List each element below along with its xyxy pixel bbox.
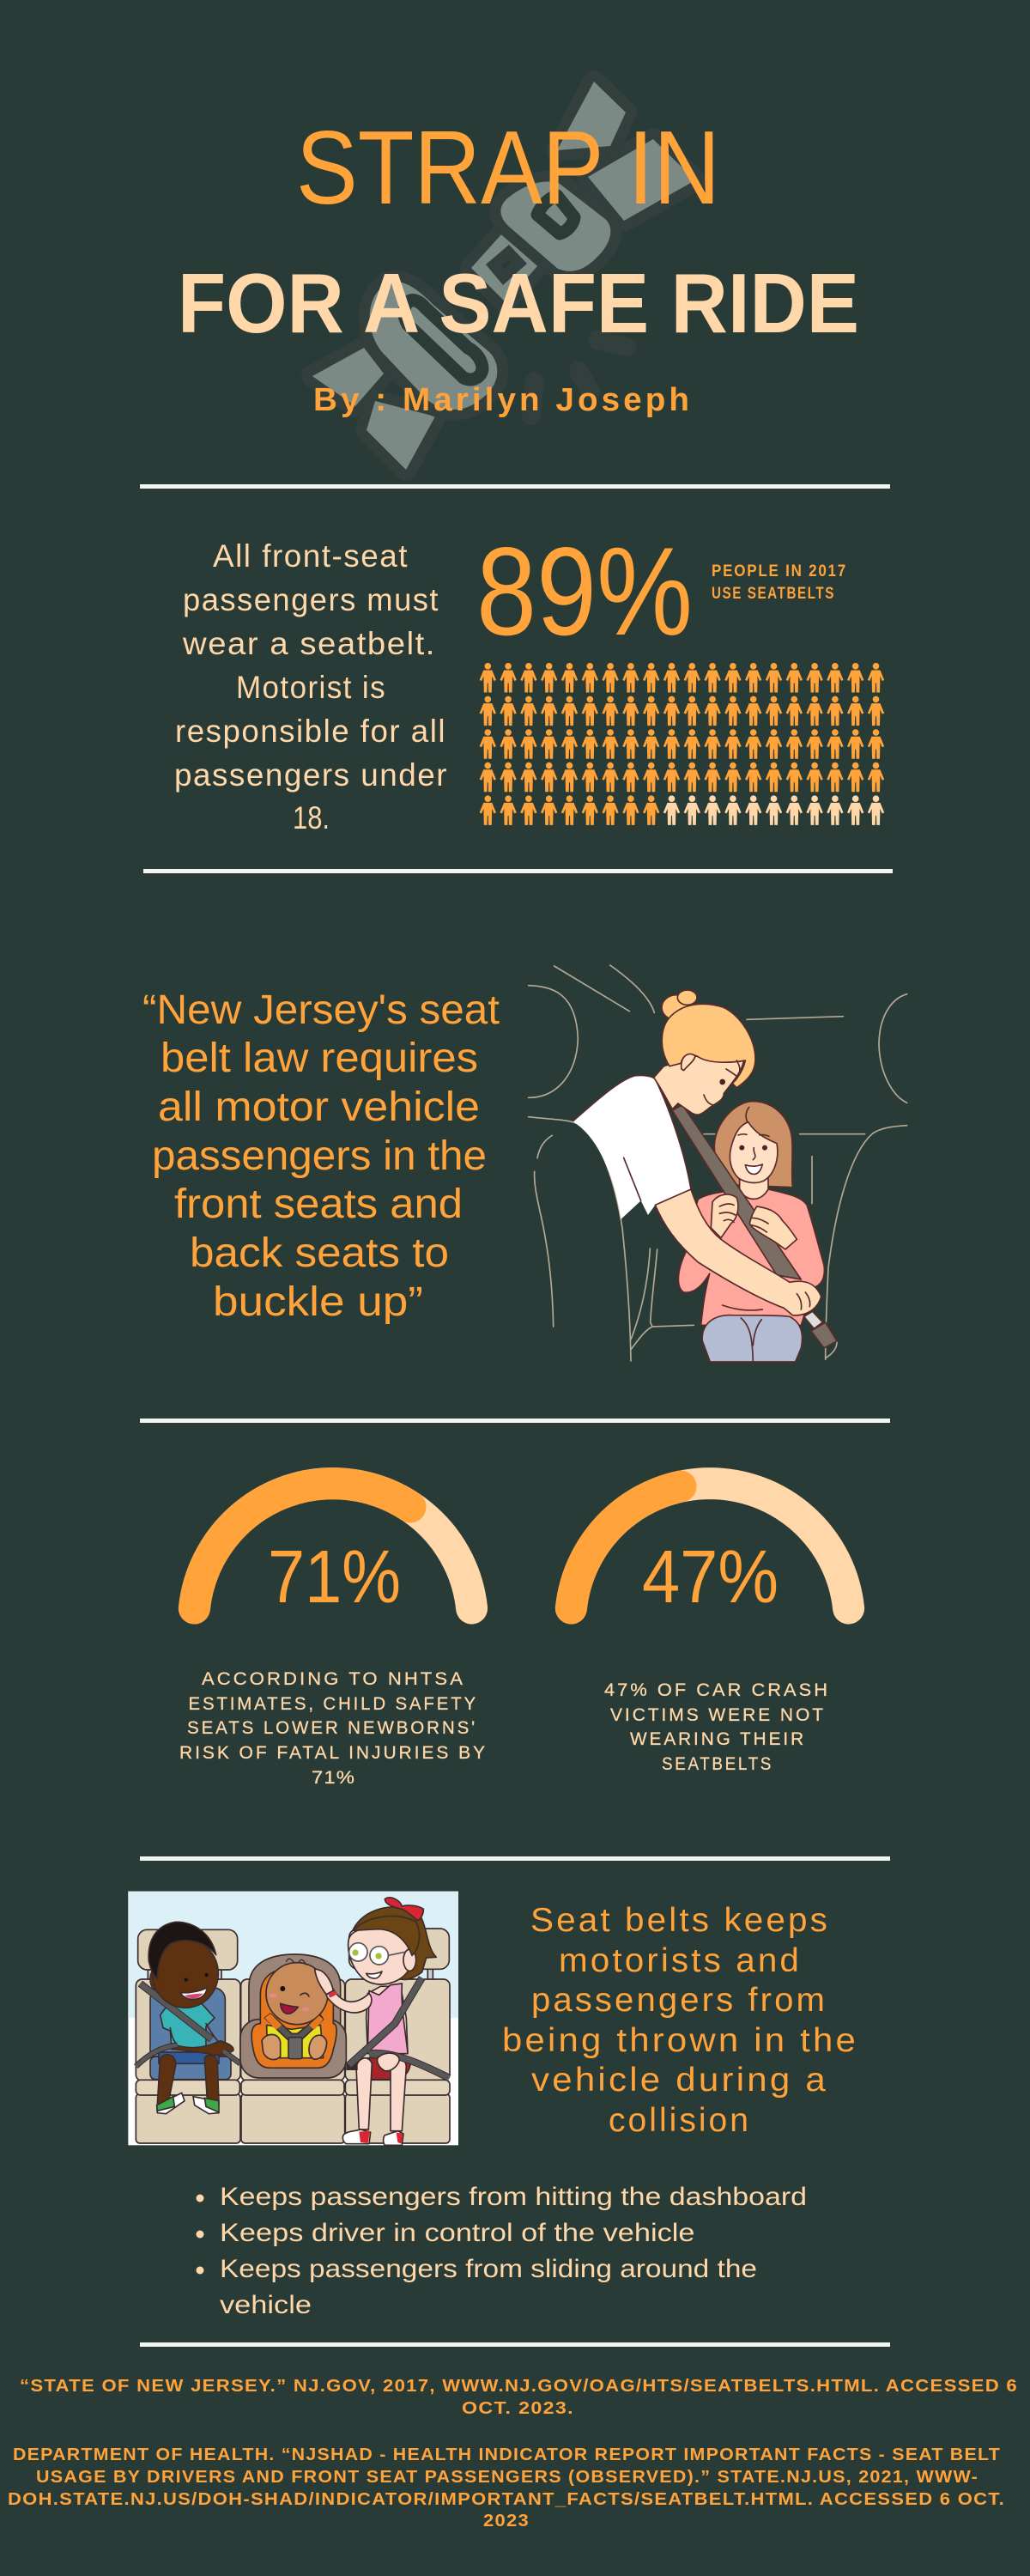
quote: New Jersey seat belt law: belt law requires <box>161 1036 478 1081</box>
caption: child safety seats: SEATS LOWER NEWBORNS' <box>187 1717 477 1738</box>
quote: New Jersey seat belt law: passengers in the <box>152 1133 487 1179</box>
stat label: people in 2017 use seatbelts: USE SEATBELTS <box>712 584 835 603</box>
bullet list: vehicle <box>220 2291 312 2319</box>
gauge value: 47%: 47% <box>642 1535 779 1619</box>
caption: crash victims: 47% OF CAR CRASH <box>604 1680 830 1700</box>
bullet list: Keeps driver in control of the vehicle <box>220 2219 695 2247</box>
reference: State of New Jersey: OCT. 2023. <box>462 2398 574 2418</box>
illustration: three children buckled in a back seat <box>128 1892 458 2145</box>
quote: New Jersey seat belt law: “New Jersey's seat <box>142 987 500 1033</box>
caption: child safety seats: RISK OF FATAL INJURIES BY <box>179 1742 488 1763</box>
reference: Department of Health: 2023 <box>483 2511 530 2530</box>
text block: front-seat passengers law: 18. <box>293 800 330 835</box>
reference: State of New Jersey <box>20 2376 1018 2418</box>
bullet list: Keeps passengers from sliding around the <box>220 2255 757 2283</box>
title: FOR A SAFE RIDE: FOR A SAFE RIDE <box>178 256 859 350</box>
caption: child safety seats: ESTIMATES, CHILD SAFETY <box>189 1693 478 1714</box>
text block: front-seat passengers law: All front-seat <box>213 538 409 574</box>
text block: seat belts keep motorists safe <box>502 1902 858 2139</box>
icon: seatbelt buckle watermark <box>312 82 695 470</box>
bullet list: Keeps passengers from hitting the dashboard <box>220 2183 807 2211</box>
quote: New Jersey seat belt law: back seats to <box>190 1230 449 1276</box>
reference: State of New Jersey: “STATE OF NEW JERSEY.” NJ.GOV, 2017, WWW.NJ.GOV/OAG/HTS/SEATBELTS.HTML. ACCESSED 6 <box>20 2376 1018 2396</box>
bullet list <box>196 2183 807 2319</box>
text block: seat belts keep motorists safe: collision <box>609 2102 751 2139</box>
stat label: people in 2017 use seatbelts <box>712 562 847 603</box>
byline: By : Marilyn Joseph <box>313 382 693 418</box>
pictogram chart: 89 of 100 people <box>480 663 884 825</box>
text block: front-seat passengers law: wear a seatbelt. <box>182 626 436 661</box>
text block: seat belts keep motorists safe: vehicle during a <box>531 2062 828 2099</box>
text block: front-seat passengers law: passengers must <box>183 582 439 617</box>
reference: Department of Health: DEPARTMENT OF HEALTH. “NJSHAD - HEALTH INDICATOR REPORT IMPORTANT FACTS - SEAT BELT <box>13 2445 1001 2464</box>
caption: crash victims: WEARING THEIR <box>630 1728 806 1749</box>
illustration: woman buckling a girl's seatbelt <box>529 965 907 1362</box>
reference: Department of Health: USAGE BY DRIVERS AND FRONT SEAT PASSENGERS (OBSERVED).” STATE.NJ.US, 2021, WWW- <box>36 2467 978 2487</box>
text block: seat belts keep motorists safe: Seat belts keeps <box>530 1902 830 1939</box>
text block: front-seat passengers law <box>174 538 448 835</box>
big statistic: 89%: 89% <box>476 521 693 661</box>
caption: crash victims: VICTIMS WERE NOT <box>610 1704 826 1725</box>
text block: front-seat passengers law: responsible for all <box>175 714 446 749</box>
quote: New Jersey seat belt law <box>142 987 500 1325</box>
text block: seat belts keep motorists safe: motorists and <box>559 1942 802 1979</box>
text block: seat belts keep motorists safe: passengers from <box>531 1982 827 2019</box>
text block: front-seat passengers law: Motorist is <box>236 670 386 705</box>
stat label: people in 2017 use seatbelts: PEOPLE IN 2017 <box>712 562 847 580</box>
gauge chart: 47% <box>571 1484 849 1608</box>
quote: New Jersey seat belt law: all motor vehicle <box>158 1084 480 1130</box>
gauge chart: 71% <box>194 1484 472 1608</box>
quote: New Jersey seat belt law: buckle up” <box>213 1279 423 1325</box>
title: STRAP IN: STRAP IN <box>296 109 720 226</box>
caption: child safety seats: ACCORDING TO NHTSA <box>202 1668 465 1689</box>
text block: seat belts keep motorists safe: being thrown in the <box>502 2022 858 2059</box>
reference: Department of Health <box>8 2445 1005 2530</box>
quote: New Jersey seat belt law: front seats and <box>174 1182 463 1227</box>
gauge value: 71%: 71% <box>268 1535 401 1619</box>
caption: child safety seats <box>179 1668 488 1788</box>
caption: child safety seats: 71% <box>312 1767 355 1788</box>
caption: crash victims <box>604 1680 830 1774</box>
reference: Department of Health: DOH.STATE.NJ.US/DOH-SHAD/INDICATOR/IMPORTANT_FACTS/SEATBELT.HTML. ACCESSED 6 OCT. <box>8 2489 1005 2509</box>
caption: crash victims: SEATBELTS <box>662 1753 773 1774</box>
text block: front-seat passengers law: passengers under <box>174 757 448 793</box>
